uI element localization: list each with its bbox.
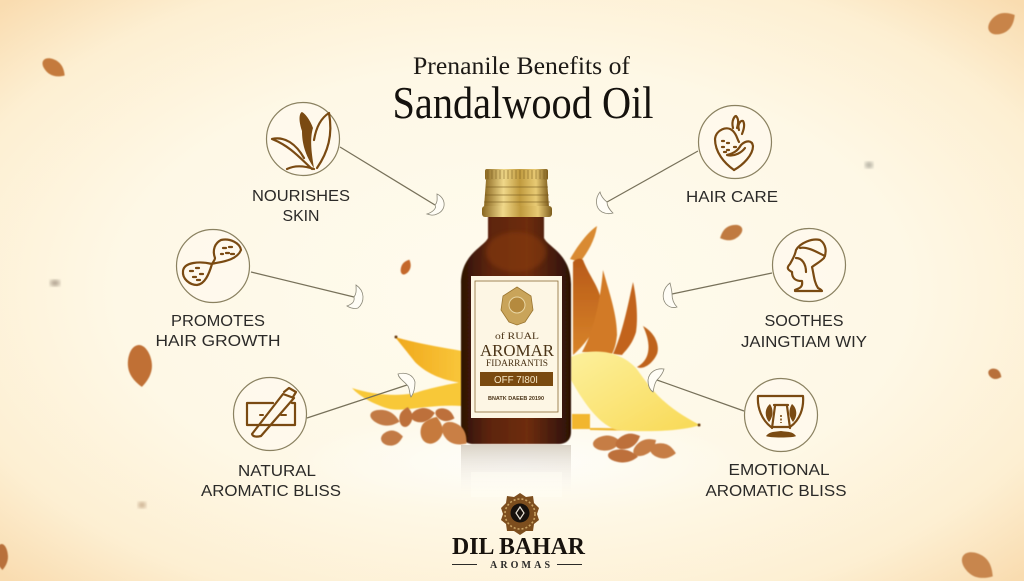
logo: Dil Bahar Aromas: AROMAS [490, 560, 550, 571]
benefit: promotes hair growth: HAIR GROWTH [156, 333, 280, 350]
benefit: natural aromatic bliss: AROMATIC BLISS [201, 483, 341, 500]
icon: no-bottle box [234, 378, 306, 450]
benefit: soothes: SOOTHES [764, 313, 844, 330]
logo: Dil Bahar Aromas: DIL BAHAR [452, 534, 586, 560]
benefit: soothes: JAINGTIAM WIY [741, 334, 867, 351]
bottle glass [461, 214, 571, 444]
connector: emotional aromatic bliss [648, 369, 744, 411]
bottle cap [482, 169, 552, 217]
benefit: promotes hair growth [156, 230, 280, 350]
almonds right of bottle [592, 430, 677, 463]
benefit: emotional aromatic bliss [706, 378, 846, 500]
benefit: natural aromatic bliss [201, 378, 341, 500]
bottle reflection [461, 445, 571, 497]
benefit: promotes hair growth: PROMOTES [171, 313, 265, 330]
label crest [501, 287, 533, 325]
icon: goblet [744, 378, 818, 452]
icon: hair follicles [176, 230, 250, 302]
icon: leaf [266, 102, 340, 176]
connector: natural aromatic bliss [307, 373, 415, 418]
benefit: emotional aromatic bliss: AROMATIC BLISS [706, 483, 846, 500]
floor highlight [290, 410, 750, 514]
right yellow petal [571, 352, 700, 431]
benefit: emotional aromatic bliss: EMOTIONAL [728, 462, 830, 479]
bottle label: BNATK DAEEB 20190 [488, 396, 544, 402]
bottle [461, 169, 571, 444]
connector: soothes [663, 273, 772, 308]
almonds in front of bottle [417, 413, 473, 451]
title: Prenanile Benefits of [413, 53, 631, 80]
benefit: natural aromatic bliss: NATURAL [238, 463, 316, 480]
logo rosette [501, 493, 539, 535]
bottle label [471, 276, 562, 418]
benefit: hair care: HAIR CARE [686, 189, 778, 206]
benefit: nourishes skin [252, 102, 350, 225]
connector: promotes hair growth [251, 272, 363, 309]
connector: hair care [596, 151, 698, 214]
logo: Dil Bahar Aromas [452, 493, 586, 571]
bottle label: FIDARRANTIS [486, 358, 548, 368]
glass highlight [486, 232, 546, 272]
icon: head profile [772, 228, 846, 302]
bottle label: of RUAL [495, 331, 539, 342]
title: Sandalwood Oil [392, 78, 654, 128]
title [392, 53, 654, 128]
bottle label: OFF 7I80I [494, 374, 538, 386]
bottle label: AROMAR [480, 341, 555, 360]
benefit: hair care [686, 106, 778, 206]
almonds left of bottle [369, 406, 456, 447]
orange petals [570, 226, 658, 368]
left yellow petals [352, 336, 462, 410]
connector: nourishes skin [340, 147, 444, 215]
icon: heart [698, 106, 772, 178]
benefit: nourishes skin: NOURISHES [252, 188, 350, 205]
benefit: soothes [741, 228, 867, 351]
benefit: nourishes skin: SKIN [282, 208, 320, 225]
